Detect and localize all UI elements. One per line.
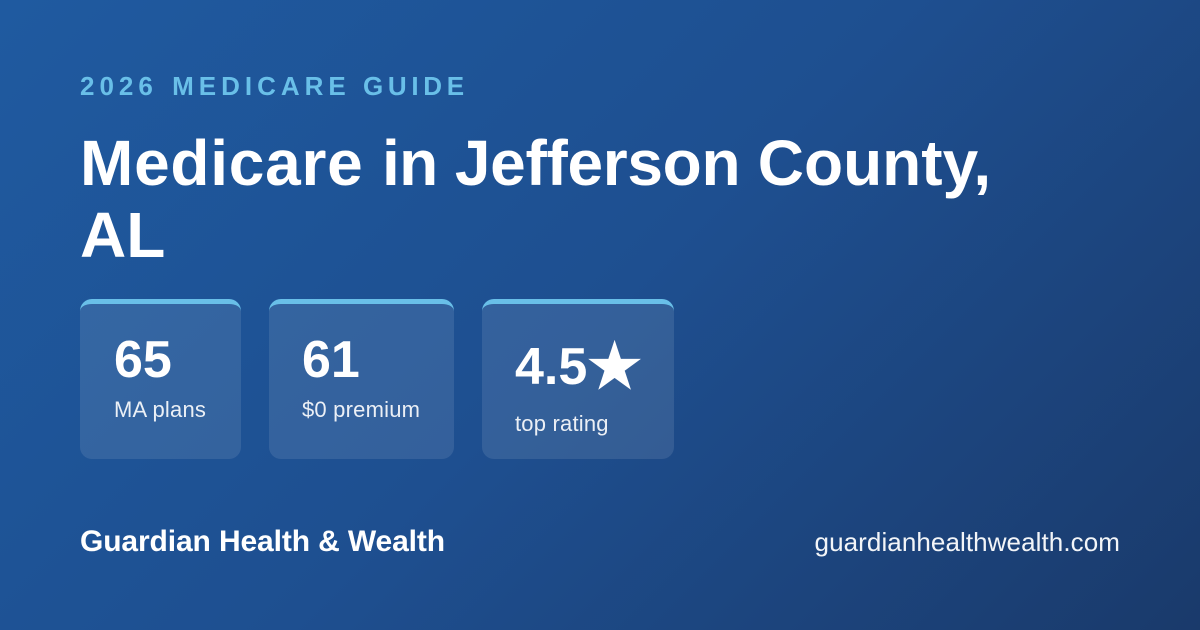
stat label: MA plans: MA plans — [114, 397, 206, 422]
stat label: $0 premium: $0 premium — [302, 397, 420, 422]
stat number: 4.5 star: 4.5★ — [515, 332, 642, 400]
title: AL — [80, 199, 165, 271]
title: Medicare in Jefferson County, — [80, 127, 991, 199]
stat card: $0 premium — [269, 299, 454, 459]
title — [80, 127, 991, 271]
stat number: 65: 65 — [114, 331, 172, 389]
stat card: MA plans — [80, 299, 241, 459]
website url: guardianhealthwealth.com — [815, 527, 1120, 557]
stat label: top rating: top rating — [515, 411, 609, 436]
stat card: top rating — [482, 299, 674, 459]
stat number: 61: 61 — [302, 331, 360, 389]
eyebrow label: 2026 MEDICARE GUIDE — [80, 71, 469, 101]
brand name: Guardian Health & Wealth — [80, 525, 445, 558]
